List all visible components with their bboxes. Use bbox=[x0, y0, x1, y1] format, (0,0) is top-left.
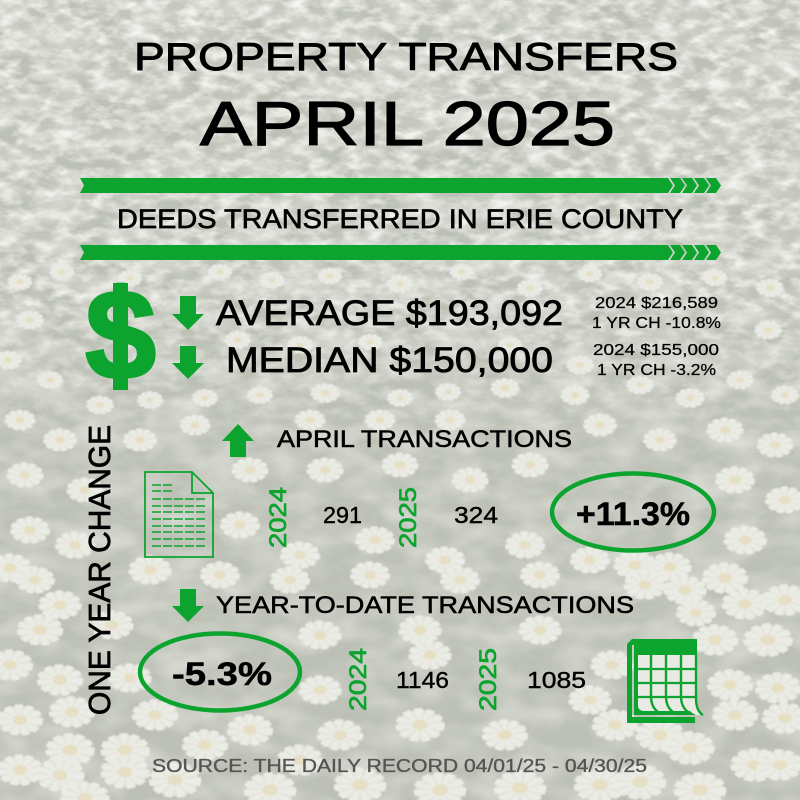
label: 2024: 2024 bbox=[345, 648, 372, 711]
average comparison: 1 YR CH -10.8% bbox=[592, 315, 721, 332]
callout: +11.3%: +11.3% bbox=[576, 496, 690, 532]
heading: year-to-date transactions: YEAR-TO-DATE TRANSACTIONS bbox=[216, 592, 634, 619]
value: 1085: 1085 bbox=[527, 667, 586, 693]
average comparison: 2024 $216,589 bbox=[595, 295, 718, 312]
panel: prices bbox=[85, 264, 721, 407]
icon: dollar sign: $ bbox=[85, 264, 156, 407]
median comparison: 1 YR CH -3.2% bbox=[597, 362, 716, 379]
value: 291: 291 bbox=[323, 502, 362, 528]
value: 324: 324 bbox=[454, 502, 498, 528]
vertical label: one year change: ONE YEAR CHANGE bbox=[82, 425, 117, 715]
title bbox=[134, 36, 678, 159]
average price: AVERAGE $193,092 bbox=[216, 294, 563, 333]
top green chevron bar bbox=[80, 178, 721, 193]
panel: april transactions bbox=[145, 424, 714, 557]
icon: spreadsheet document bbox=[145, 472, 213, 557]
bottom green chevron bar bbox=[80, 245, 721, 260]
panel: year-to-date transactions bbox=[140, 589, 703, 723]
average comparison bbox=[592, 295, 721, 332]
label: 2025: 2025 bbox=[475, 648, 502, 711]
median price: MEDIAN $150,000 bbox=[226, 341, 553, 380]
value: 1146: 1146 bbox=[396, 667, 449, 693]
title line: april 2025: APRIL 2025 bbox=[200, 90, 615, 159]
icon: down arrow bbox=[172, 589, 204, 622]
callout: -5.3%: -5.3% bbox=[172, 656, 272, 692]
callout: +11.3% bbox=[552, 474, 714, 550]
source note: SOURCE: THE DAILY RECORD 04/01/25 - 04/30/25 bbox=[152, 756, 647, 776]
title line: property transfers: PROPERTY TRANSFERS bbox=[134, 36, 678, 79]
icon: calendar bbox=[627, 639, 703, 723]
subtitle: DEEDS TRANSFERRED IN ERIE COUNTY bbox=[117, 204, 683, 234]
label: 2025: 2025 bbox=[395, 487, 422, 548]
label: 2024: 2024 bbox=[265, 487, 292, 548]
icon: up arrow bbox=[222, 424, 254, 457]
icon: average down arrow bbox=[172, 296, 204, 330]
callout: -5.3% bbox=[140, 634, 300, 710]
heading: april transactions: APRIL TRANSACTIONS bbox=[277, 426, 572, 453]
median comparison bbox=[593, 342, 719, 379]
icon: median down arrow bbox=[172, 346, 204, 379]
median comparison: 2024 $155,000 bbox=[593, 342, 719, 359]
